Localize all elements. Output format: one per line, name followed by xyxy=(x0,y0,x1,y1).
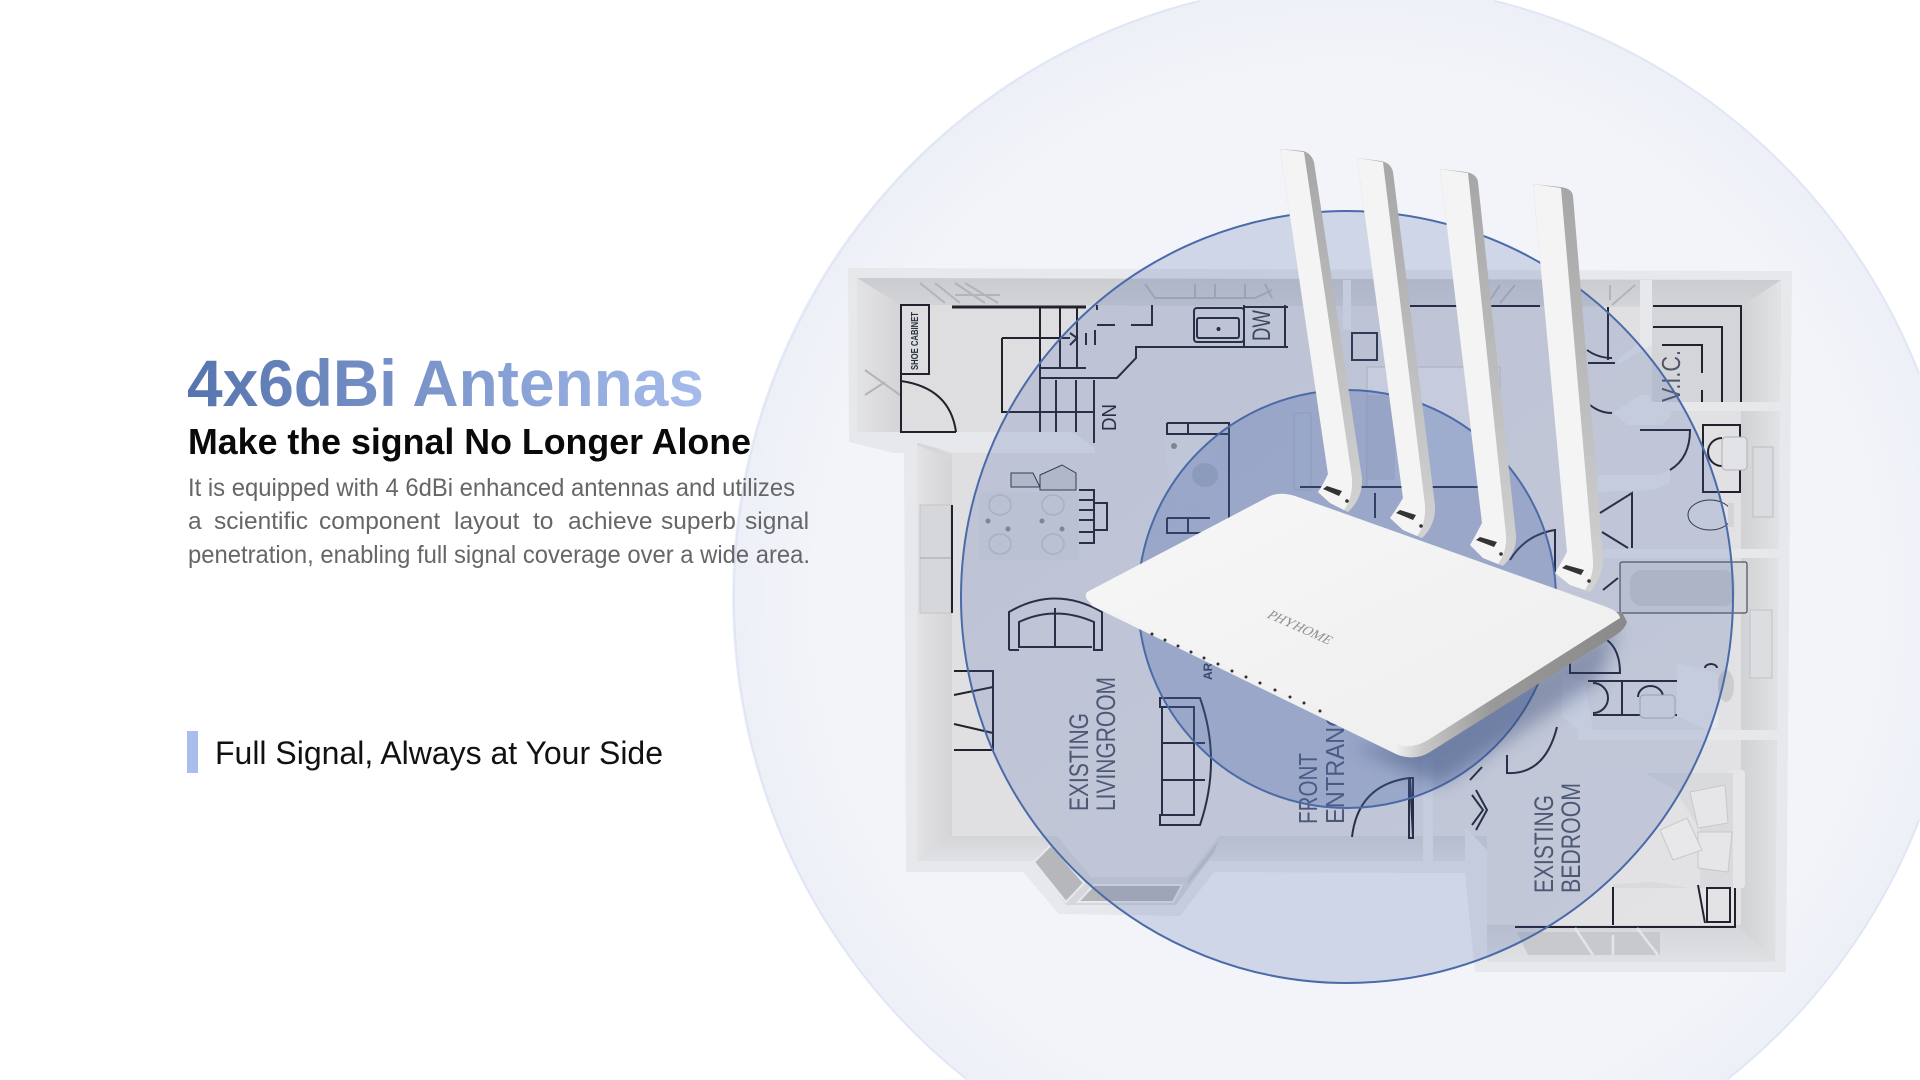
sofa two xyxy=(1160,698,1211,825)
dining table with chairs xyxy=(979,465,1107,560)
router shadow xyxy=(1350,625,1620,785)
floor plan outer walls xyxy=(848,268,1792,972)
description text block: penetration, enabling full signal coverage over a wide area. xyxy=(188,541,810,569)
description text block: scientific xyxy=(214,508,308,535)
router brand logo: PHYHOME xyxy=(1263,609,1336,648)
description text block: component xyxy=(319,508,440,535)
tagline accent bar xyxy=(187,731,198,773)
walk in closet floor xyxy=(1652,307,1741,402)
antenna one xyxy=(1280,149,1362,512)
router side face xyxy=(1087,596,1627,757)
living room label: LIVINGROOM xyxy=(1091,677,1121,811)
router xyxy=(1086,149,1627,785)
side cabinet with plant xyxy=(1163,423,1229,533)
closet divider lines xyxy=(1410,767,1487,837)
router top surface xyxy=(1086,494,1620,746)
bedroom window xyxy=(1517,928,1660,955)
bay window xyxy=(1034,840,1219,902)
description text block xyxy=(188,474,810,569)
description text block: achieve xyxy=(568,508,652,535)
inner coverage circle xyxy=(1138,390,1556,808)
living room label xyxy=(1064,677,1121,811)
interior wall shading xyxy=(857,278,1781,962)
master bedroom furniture xyxy=(1294,333,1500,518)
front door xyxy=(1352,778,1413,838)
tagline: Full Signal, Always at Your Side xyxy=(215,735,663,771)
front entrance label xyxy=(1293,694,1350,824)
interior partition walls xyxy=(849,280,1780,972)
subtitle: Make the signal No Longer Alone xyxy=(188,421,751,462)
antenna three xyxy=(1440,169,1516,566)
top windows xyxy=(865,283,1635,395)
floor plan xyxy=(848,268,1792,972)
bathtub xyxy=(1603,562,1747,613)
bed xyxy=(1592,763,1745,890)
front entrance label: FRONT xyxy=(1293,753,1323,824)
left window panel xyxy=(920,505,952,613)
antenna four xyxy=(1533,184,1603,592)
description text block: to xyxy=(533,508,553,535)
router status LEDs xyxy=(1150,632,1322,712)
bathroom fixtures xyxy=(1600,425,1773,548)
description text block: a xyxy=(188,508,202,535)
room floors xyxy=(901,305,1741,925)
walk in closet label: V.I.C. xyxy=(1656,350,1686,402)
entry door swing xyxy=(901,305,956,432)
bedroom label xyxy=(1529,783,1586,893)
antenna two xyxy=(1357,158,1435,538)
entry, stair and kitchen line work xyxy=(1002,305,1288,443)
small clipped label: AR xyxy=(1201,662,1215,680)
shoe cabinet: SHOE CABINET xyxy=(910,312,921,370)
medium coverage circle xyxy=(961,211,1733,983)
walk in closet lines xyxy=(1653,306,1741,402)
description text block: signal xyxy=(745,508,809,535)
bedroom label: BEDROOM xyxy=(1556,783,1586,893)
powder room fixtures xyxy=(1570,610,1772,718)
shoe cabinet xyxy=(901,305,929,374)
living room label: EXISTING xyxy=(1064,713,1094,811)
background signal circle xyxy=(732,0,1920,1080)
kitchen sink xyxy=(1194,308,1244,342)
title: 4x6dBi Antennas xyxy=(187,346,704,420)
sofa one xyxy=(1009,598,1102,650)
description text block: layout xyxy=(454,508,520,535)
bedroom door line work xyxy=(1410,306,1615,573)
stairs down label: DN xyxy=(1099,404,1121,431)
side stair xyxy=(954,671,993,750)
bedroom lines and nightstand xyxy=(1515,885,1735,927)
bedroom door xyxy=(1507,727,1557,773)
front entrance label: ENTRANCE xyxy=(1320,694,1350,824)
bedroom label: EXISTING xyxy=(1529,795,1559,893)
description text block: It is equipped with 4 6dBi enhanced antennas and utilizes xyxy=(188,474,795,502)
perspective inner wall faces xyxy=(857,278,1781,962)
dishwasher label: DW xyxy=(1248,310,1276,341)
description text block: superb xyxy=(661,508,736,535)
